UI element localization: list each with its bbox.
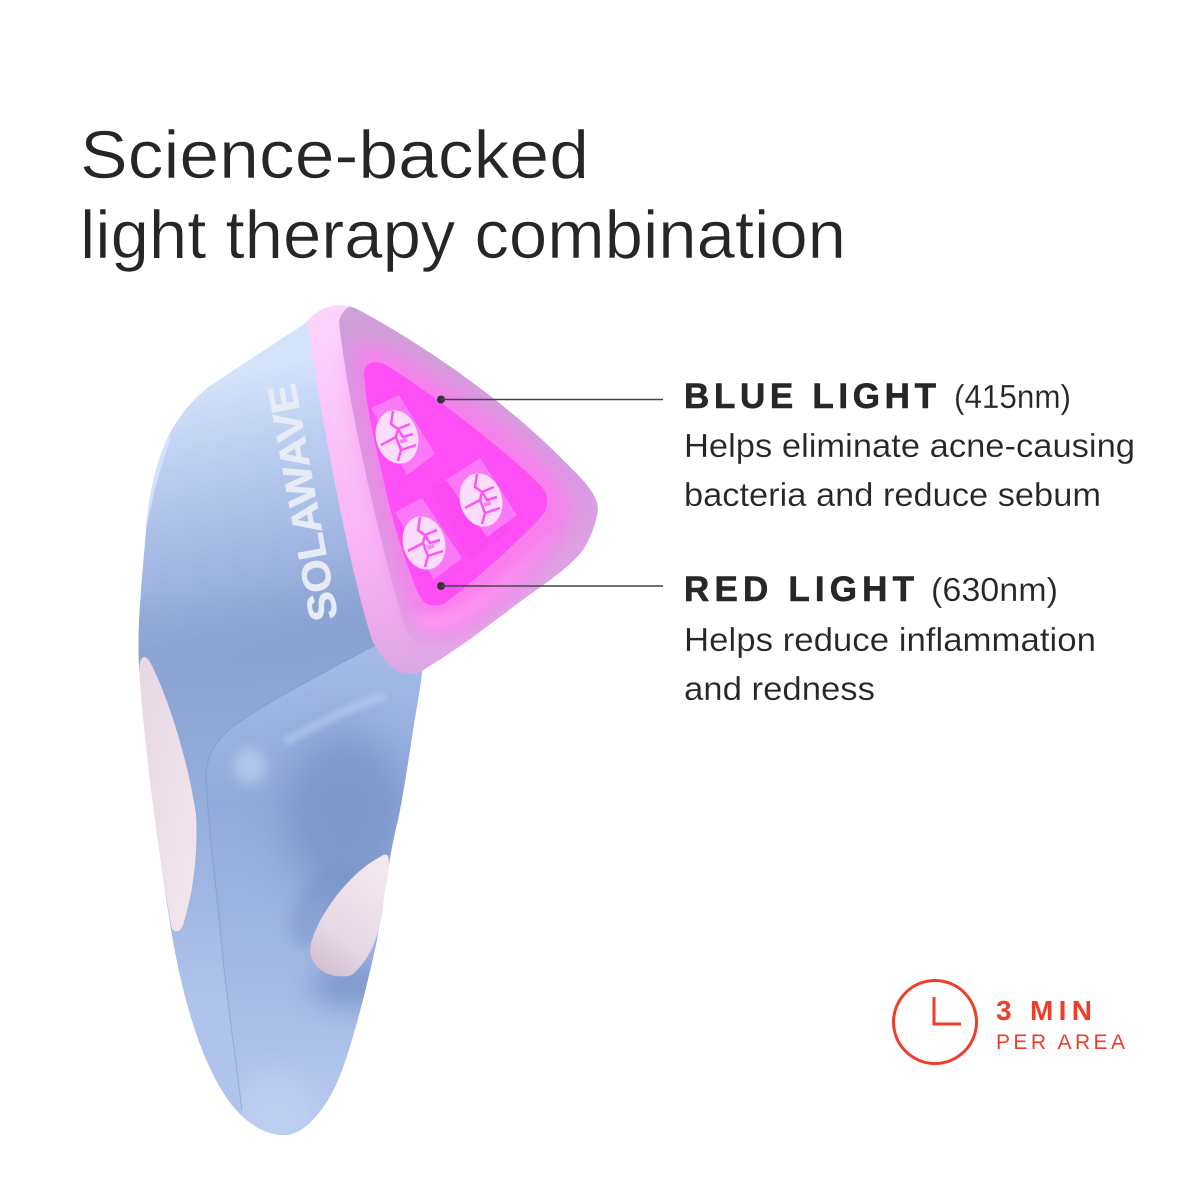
brand text: SOLAWAVE xyxy=(260,380,347,624)
LED chip 2 xyxy=(446,458,517,537)
side pad xyxy=(139,657,196,931)
thumb button xyxy=(310,855,389,976)
duration label: PER AREA xyxy=(996,1031,1125,1054)
device body xyxy=(138,322,422,1135)
red light text block: (630nm) xyxy=(931,571,1058,608)
red light text block: RED LIGHT xyxy=(684,570,914,609)
blue light text block: Helps eliminate acne-causing xyxy=(684,427,1135,464)
side button small xyxy=(146,436,170,528)
LED chip 3 xyxy=(395,498,462,580)
red light text block: and redness xyxy=(684,670,875,707)
red light text block xyxy=(684,570,1096,707)
blue light text block xyxy=(684,377,1135,513)
title: Science-backed xyxy=(80,117,589,193)
red light text block: Helps reduce inflammation xyxy=(684,621,1096,658)
blue light leader line xyxy=(437,396,663,404)
blue light text block: (415nm) xyxy=(954,378,1071,415)
device illustration xyxy=(120,305,620,1150)
title: light therapy combination xyxy=(80,197,846,273)
duration label: 3 MIN xyxy=(996,995,1092,1026)
duration label xyxy=(996,995,1125,1054)
LED chip 1 xyxy=(370,395,435,475)
blue light text block: BLUE LIGHT xyxy=(684,377,936,416)
LED panel xyxy=(364,362,547,606)
blue light text block: bacteria and reduce sebum xyxy=(684,476,1101,513)
red light leader line xyxy=(437,582,663,590)
title xyxy=(80,117,846,273)
head outer rim xyxy=(307,305,620,674)
clock icon xyxy=(894,980,976,1064)
